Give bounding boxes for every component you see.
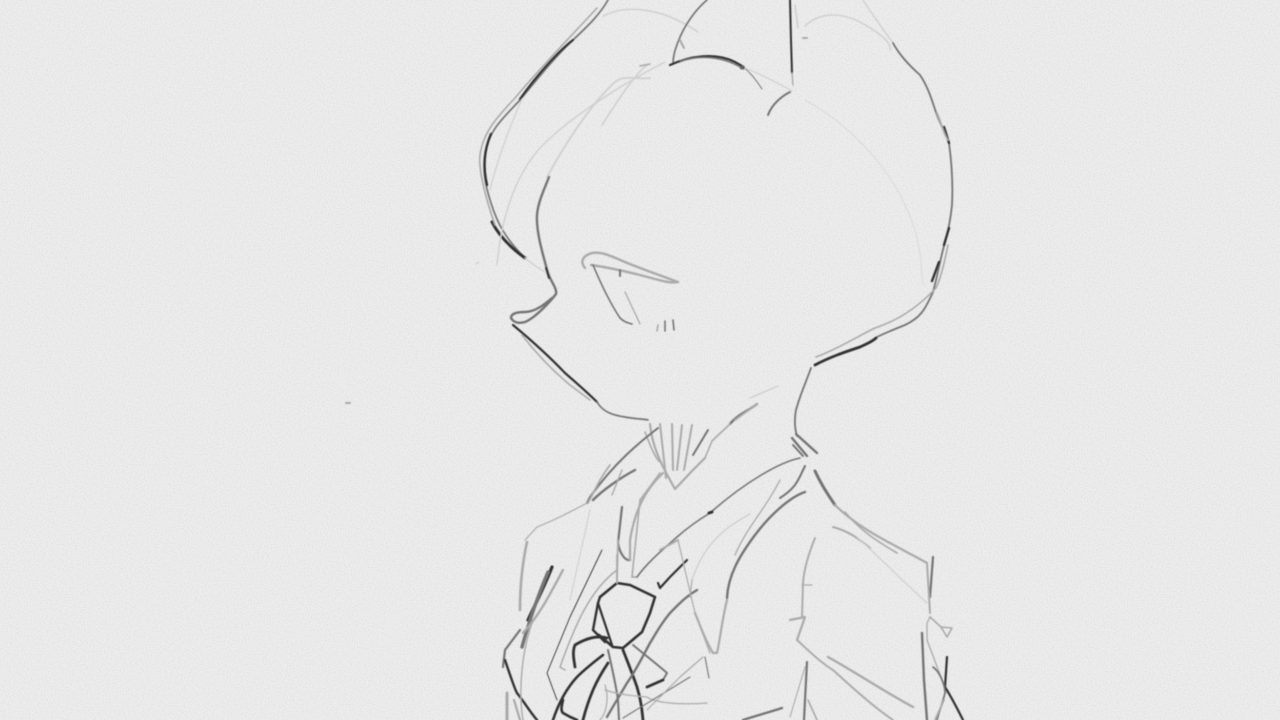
collar V: [645, 404, 757, 489]
blush marks: [657, 320, 674, 331]
forehead strands: [547, 64, 923, 285]
face profile: [511, 177, 648, 420]
tie ribbons: [553, 590, 709, 720]
figure sketch: [346, 0, 963, 720]
ear detail: [582, 253, 678, 324]
tie knot: [593, 555, 687, 648]
paper specks: [346, 262, 479, 403]
long strokes left arm: [503, 550, 617, 720]
ear tufts top: [670, 0, 890, 115]
right arm: [922, 617, 963, 720]
neck: [750, 368, 817, 456]
hair outline: [480, 0, 698, 272]
right hair outline: [815, 0, 952, 365]
right shoulder: [815, 471, 933, 613]
left lapel and shoulder: [520, 428, 663, 610]
sleeve and torso folds: [743, 538, 913, 720]
right lapel: [637, 458, 805, 653]
